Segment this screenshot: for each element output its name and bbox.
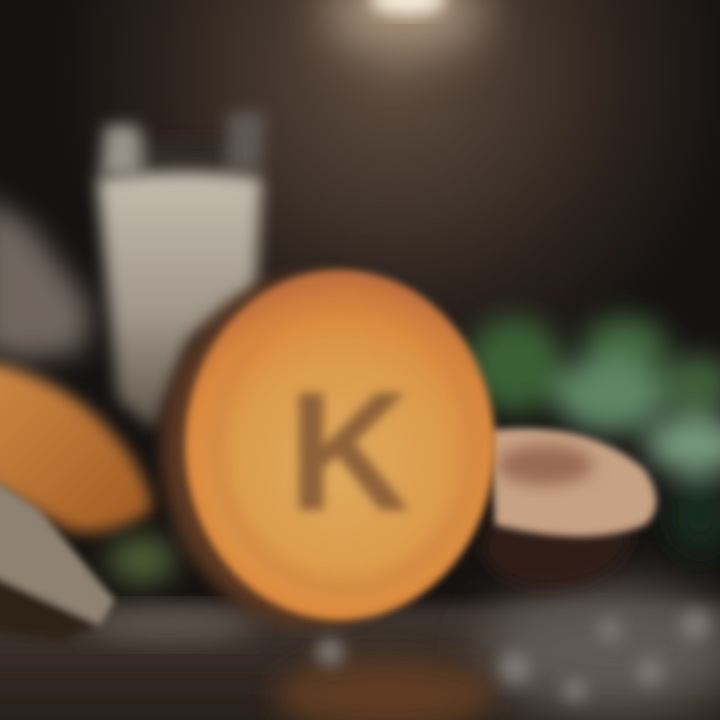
coin inner ring bbox=[217, 302, 473, 588]
coin edge bbox=[162, 274, 462, 626]
coin face bbox=[185, 270, 495, 620]
grey cloth on left bbox=[0, 195, 90, 360]
greens on right bbox=[467, 317, 720, 555]
table speckles bbox=[316, 610, 710, 702]
milk body bbox=[97, 172, 262, 430]
glass of milk bbox=[97, 112, 265, 430]
letter K: K bbox=[288, 357, 410, 547]
table surface bbox=[0, 585, 720, 720]
small green leaf bbox=[108, 536, 176, 584]
orange bread bbox=[0, 360, 152, 532]
vitamin K coin bbox=[162, 270, 495, 626]
glass rim bbox=[100, 112, 265, 175]
mushroom slice bbox=[480, 428, 656, 587]
ceiling light bbox=[325, 0, 485, 54]
light wedge bottom left bbox=[0, 470, 115, 640]
